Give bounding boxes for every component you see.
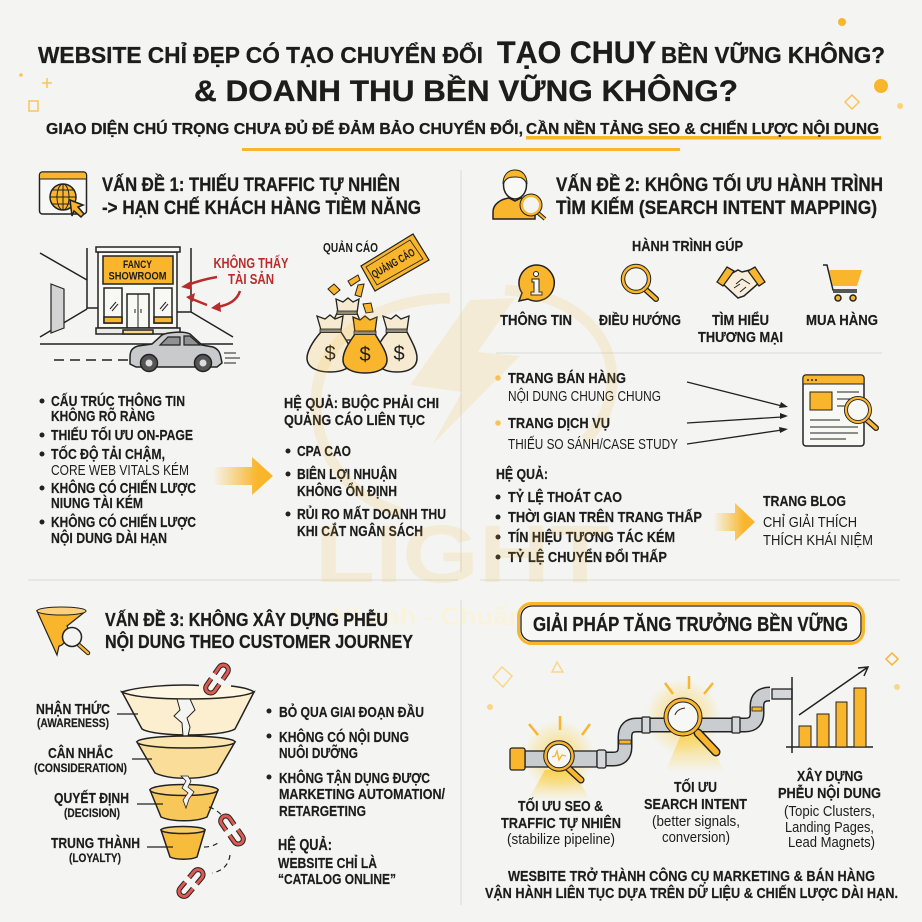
solution 2 text: conversion) (662, 829, 730, 846)
heading: problem 3: VẤN ĐỀ 3: KHÔNG XÂY DỰNG PHỄU (105, 609, 388, 630)
ad ticket and money bags: QUẢN CÁO (323, 240, 378, 255)
watermark logo overlay: LIGHT (315, 509, 610, 600)
icon: handshake (717, 267, 765, 298)
ad ticket and money bags: QUẢNG CÁO (369, 246, 418, 281)
list: problem 2 consequences: THỜI GIAN TRÊN TRANG THẤP (508, 508, 702, 526)
subtitle (46, 119, 881, 151)
solution 2 text (644, 778, 747, 846)
magnifier: SEO (529, 716, 590, 780)
page types list: THIẾU SO SÁNH/CASE STUDY (508, 436, 678, 453)
list: problem 1 consequences: KHI CẮT NGÂN SÁCH (297, 522, 423, 540)
page types list (495, 370, 678, 453)
arrow: causes to consequences (212, 457, 273, 495)
consequence: catalog online: HỆ QUẢ: (278, 835, 332, 854)
funnel stage labels: QUYẾT ĐỊNH (54, 790, 129, 807)
header decorations (19, 18, 903, 111)
journey stage labels: THƯƠNG MẠI (698, 329, 783, 346)
funnel stage labels: (AWARENESS) (37, 716, 109, 730)
showroom illustration: FANCY (123, 259, 153, 271)
list: problem 1 causes: NỘI DUNG DÀI HẠN (51, 529, 167, 547)
heading: problem 2: TÌM KIẾM (SEARCH INTENT MAPPING) (556, 196, 877, 219)
title (38, 34, 885, 108)
blog page note: THÍCH KHÁI NIỆM (763, 532, 873, 549)
blog page note: TRANG BLOG (763, 493, 846, 510)
list: problem 1 consequences: RỦI RO MẤT DOANH THU (297, 505, 446, 523)
icon: shopping cart (823, 265, 862, 301)
list: problem 3 issues: NUÔI DƯỠNG (279, 744, 358, 762)
funnel tier: consideration (137, 736, 235, 778)
pipeline illustration (510, 679, 792, 800)
ad ticket and money bags: $ (324, 343, 336, 365)
consequence: catalog online: “CATALOG ONLINE” (278, 871, 396, 888)
broken chain link: middle (219, 814, 245, 846)
list: problem 1 consequences: KHÔNG ỔN ĐỊNH (297, 482, 397, 500)
list: problem 3 issues: BỎ QUA GIAI ĐOẠN ĐẦU (279, 703, 424, 721)
broken funnel (122, 663, 254, 898)
page types list: TRANG DỊCH VỤ (508, 415, 610, 432)
red callout: asset not visible: TÀI SẢN (228, 271, 274, 288)
list: problem 1 causes: NIUNG TÀI KÉM (51, 495, 143, 512)
red callout: asset not visible: KHÔNG THẤY (214, 254, 289, 272)
title: TẠO CHUY (497, 34, 656, 70)
funnel stage labels: NHẬN THỨC (36, 700, 110, 718)
broken chain link: top (204, 663, 230, 695)
solution 1 text: TRAFFIC TỰ NHIÊN (501, 814, 621, 832)
title: & DOANH THU BỀN VỮNG KHÔNG? (194, 74, 738, 108)
dashed connectors (204, 807, 230, 873)
ad ticket and money bags: $ (393, 343, 405, 365)
watermark logo overlay (315, 290, 612, 600)
funnel stage labels (34, 700, 173, 865)
title: WEBSITE CHỈ ĐẸP CÓ TẠO CHUYỂN ĐỔI (38, 40, 483, 68)
closing statement (485, 867, 898, 902)
list: problem 1 causes (40, 392, 196, 547)
solution 3 text: PHỄU NỘI DUNG (778, 784, 881, 802)
icon: search (623, 266, 656, 299)
funnel stage labels: (CONSIDERATION) (34, 761, 127, 775)
page types list: TRANG BÁN HÀNG (508, 370, 626, 387)
solution 1 text (501, 797, 621, 848)
ad ticket and money bags: $ (359, 344, 371, 366)
solution heading pill (518, 604, 864, 644)
list: problem 2 consequences: TỶ LỆ CHUYỂN ĐỔI THẤP (508, 548, 667, 566)
list: problem 3 issues (266, 703, 446, 820)
journey stage labels: MUA HÀNG (806, 312, 878, 329)
list: problem 2 consequences: TỶ LỆ THOÁT CAO (508, 488, 622, 506)
watermark tagline: Nhanh - Chuẩn - Đẹp (332, 603, 600, 631)
title: BỀN VỮNG KHÔNG? (661, 41, 885, 68)
growth bar chart (786, 667, 873, 753)
funnel tier: decision (150, 776, 218, 821)
broken chain link: bottom (177, 868, 205, 898)
list: problem 1 causes: TỐC ĐỘ TẢI CHẬM, (51, 445, 165, 463)
list: problem 1 consequences: CPA CAO (297, 443, 351, 460)
solution 3 text (778, 767, 881, 851)
list: problem 1 causes: CẤU TRÚC THÔNG TIN (51, 392, 185, 410)
journey stage labels: TÌM HIỂU (712, 311, 769, 329)
solution 2 text: SEARCH INTENT (644, 796, 747, 813)
list: problem 1 causes: KHÔNG RÕ RÀNG (51, 407, 155, 425)
icon: funnel with magnifier (37, 607, 88, 655)
list: problem 1 causes: KHÔNG CÓ CHIẾN LƯỢC (51, 479, 196, 497)
funnel tier: loyalty (161, 826, 205, 859)
list: problem 1 causes: THIẾU TỐI ƯU ON-PAGE (51, 426, 193, 444)
list: problem 2 consequences (496, 465, 702, 566)
icon: information (519, 265, 554, 301)
funnel tier: awareness (122, 685, 254, 736)
arrow: consequences to blog (713, 503, 755, 541)
heading: problem 1 (102, 172, 421, 219)
funnel stage labels: CÂN NHẮC (48, 744, 113, 762)
list: problem 2 consequences: HỆ QUẢ: (496, 465, 548, 483)
list: problem 1 consequences: HỆ QUẢ: BUỘC PHẢI CHI (284, 394, 439, 412)
journey heading: HÀNH TRÌNH GÚP (632, 237, 743, 255)
showroom illustration: SHOWROOM (108, 270, 166, 282)
heading: problem 3: NỘI DUNG THEO CUSTOMER JOURNEY (105, 631, 414, 652)
consequence: catalog online (278, 835, 396, 888)
list: problem 3 issues: RETARGETING (279, 803, 366, 820)
red callout: asset not visible (181, 254, 289, 312)
blog page note: CHỈ GIẢI THÍCH (763, 514, 857, 531)
list: problem 1 causes: KHÔNG CÓ CHIẾN LƯỢC (51, 513, 196, 531)
solution 3 text: Lead Magnets) (788, 834, 875, 851)
showroom illustration (40, 247, 240, 372)
arrows to document (687, 382, 788, 444)
subtitle: CẦN NỀN TẢNG SEO & CHIẾN LƯỢC NỘI DUNG (526, 119, 879, 138)
heading: problem 3 (105, 609, 414, 652)
ad ticket and money bags (307, 234, 429, 373)
heading: problem 2 (556, 172, 883, 219)
funnel stage labels: (DECISION) (64, 806, 120, 820)
heading: problem 1: -> HẠN CHẾ KHÁCH HÀNG TIỀM NĂNG (102, 196, 421, 219)
solution 2 text: (better signals, (652, 813, 740, 830)
list: problem 3 issues: MARKETING AUTOMATION/ (279, 786, 446, 803)
list: problem 2 consequences: TÍN HIỆU TƯƠNG TÁC KÉM (508, 528, 675, 546)
solution 1 text: TỐI ƯU SEO & (518, 797, 603, 815)
journey stage labels (500, 311, 878, 346)
funnel stage labels: (LOYALTY) (69, 851, 121, 865)
journey stage labels: THÔNG TIN (500, 311, 572, 329)
icon: person with magnifier (493, 170, 545, 219)
solution 2 text: TỐI ƯU (674, 778, 717, 796)
blog page note (763, 493, 873, 549)
list: problem 1 consequences (284, 394, 446, 540)
solution 3 text: XÂY DỰNG (797, 767, 863, 785)
list: problem 1 consequences: BIÊN LỢI NHUẬN (297, 465, 397, 483)
solution heading pill: GIẢI PHÁP TĂNG TRƯỞNG BỀN VỮNG (533, 612, 848, 636)
list: problem 3 issues: KHÔNG TẬN DỤNG ĐƯỢC (279, 769, 430, 787)
page types list: NỘI DUNG CHUNG CHUNG (508, 388, 661, 405)
list: problem 3 issues: KHÔNG CÓ NỘI DUNG (279, 728, 409, 746)
icon: web document with magnifier (803, 375, 876, 446)
solution 3 text: Landing Pages, (785, 819, 874, 836)
solution 1 text: (stabilize pipeline) (507, 831, 615, 848)
heading: problem 2: VẤN ĐỀ 2: KHÔNG TỐI ƯU HÀNH TRÌNH (556, 172, 883, 196)
heading: problem 1: VẤN ĐỀ 1: THIẾU TRAFFIC TỰ NHIÊN (102, 172, 400, 196)
funnel stage labels: TRUNG THÀNH (51, 835, 140, 852)
list: problem 1 causes: CORE WEB VITALS KÉM (51, 462, 189, 479)
consequence: catalog online: WEBSITE CHỈ LÀ (278, 855, 377, 872)
icon: browser with globe (40, 172, 86, 217)
subtitle: GIAO DIỆN CHÚ TRỌNG CHƯA ĐỦ ĐỂ ĐẢM BẢO CHUYỂN ĐỔI, (46, 119, 523, 138)
solution decorations (487, 653, 900, 710)
magnifier: search intent (665, 676, 716, 752)
journey stage labels: ĐIỀU HƯỚNG (599, 311, 681, 329)
solution 3 text: (Topic Clusters, (784, 803, 875, 820)
list: problem 1 consequences: QUẢNG CÁO LIÊN TỤC (284, 411, 425, 429)
